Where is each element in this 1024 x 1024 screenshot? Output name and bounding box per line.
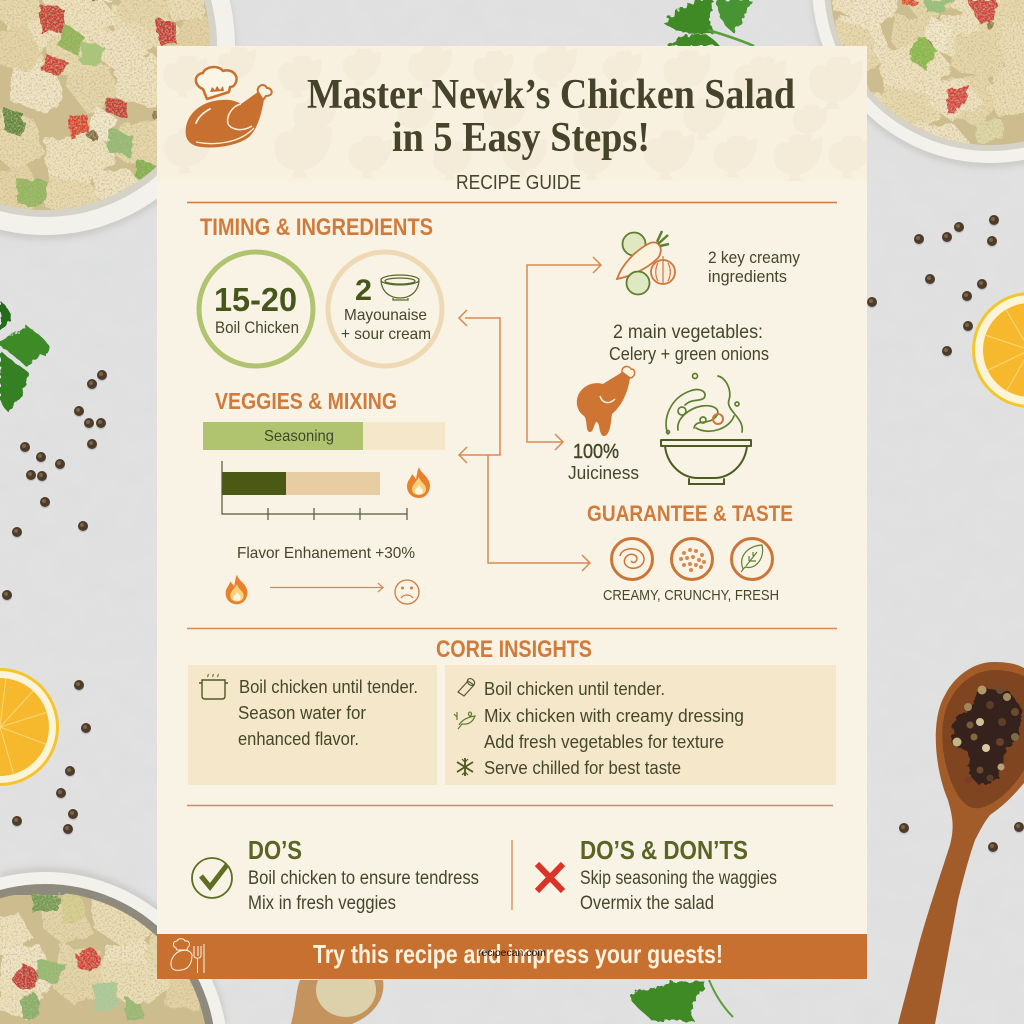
- section: don'ts: [537, 835, 777, 914]
- list: do's: [248, 868, 479, 914]
- heading: veggies: VEGGIES & MIXING: [215, 388, 397, 414]
- photo: parsley top: [664, 0, 754, 46]
- bar chart: mixing: [222, 461, 407, 520]
- list: do's: Mix in fresh veggies: [248, 893, 396, 914]
- list: don'ts: Skip seasoning the waggies: [580, 868, 777, 889]
- panel: boil tips: Season water for: [238, 703, 366, 723]
- icon: check: [192, 858, 232, 898]
- icon: fresh leaf: [732, 538, 772, 580]
- text: main vegetables: Celery + green onions: [609, 344, 769, 364]
- text: key creamy ingredients: [708, 248, 800, 286]
- stat circle: creamy base: + sour cream: [341, 326, 431, 343]
- text: main vegetables: 2 main vegetables:: [613, 322, 763, 343]
- photo: lemon left: [0, 668, 59, 786]
- panel: mixing tips: Mix chicken with creamy dressing: [484, 706, 744, 726]
- title: [307, 72, 795, 161]
- photo: salad bowl top left: [0, 0, 236, 240]
- watermark: recipecan.com: [478, 948, 546, 959]
- panel: boil tips: Boil chicken until tender.: [239, 677, 418, 697]
- progress bar: seasoning: Seasoning: [264, 428, 334, 445]
- icon: chicken with chef hat: [186, 67, 272, 148]
- progress bar: seasoning: [203, 422, 445, 450]
- text: key creamy ingredients: ingredients: [708, 267, 787, 286]
- panel: mixing tips: [445, 665, 836, 785]
- icon: flame: [407, 467, 430, 498]
- list: do's: Boil chicken to ensure tendress: [248, 868, 479, 889]
- icon: chicken outline: [171, 939, 204, 973]
- section: do's: [192, 835, 479, 914]
- list: don'ts: [580, 868, 777, 914]
- connector arrows: [459, 257, 601, 571]
- icon: vegetables: [617, 231, 675, 294]
- stat circle: creamy base: 2: [355, 274, 372, 307]
- footer banner: Try this recipe and impress your guests!: [313, 939, 723, 969]
- section: timing and ingredients: [199, 214, 442, 366]
- stat circle: boil time: 15-20: [214, 281, 297, 318]
- panel: mixing tips: Serve chilled for best taste: [484, 758, 681, 778]
- footer banner: [157, 934, 867, 979]
- list: don'ts: Overmix the salad: [580, 893, 714, 914]
- section: core insights: [188, 636, 836, 785]
- icon: creamy swirl: [612, 538, 652, 580]
- stat circle: creamy base: Mayounaise: [344, 307, 427, 324]
- label: flavor enhancement: Flavor Enhanement +30%: [237, 545, 415, 562]
- title: in 5 Easy Steps!: [392, 115, 650, 161]
- icon: juicy chicken: [577, 366, 635, 436]
- heading: don'ts: DO’S & DON’TS: [580, 835, 748, 865]
- heading: do's: DO’S: [248, 835, 302, 865]
- stat circle: creamy base: [328, 252, 442, 366]
- decor: scattered peppercorns: [2, 215, 1024, 854]
- text: juiciness: 100%: [573, 441, 619, 463]
- arrow: flame to sad face: [270, 583, 383, 592]
- icon: flame small: [226, 575, 247, 604]
- section: guarantee and taste: [587, 501, 793, 604]
- photo: parsley left: [0, 301, 50, 412]
- label: textures: CREAMY, CRUNCHY, FRESH: [603, 587, 779, 604]
- photo: salad bowl top right: [811, 0, 1024, 173]
- icon: mixing bowl with swirl: [661, 374, 751, 484]
- photo: parsley bottom: [630, 980, 733, 1021]
- photo: wooden spoon with peppercorns: [898, 662, 1024, 1024]
- subtitle: RECIPE GUIDE: [456, 172, 581, 194]
- icon: red cross: [537, 864, 563, 891]
- panel: mixing tips: Boil chicken until tender.: [484, 679, 665, 699]
- panel: recipe card: [157, 45, 872, 979]
- photo: salad bowl bottom left: [0, 867, 227, 1024]
- heading: guarantee: GUARANTEE & TASTE: [587, 501, 793, 526]
- heading: core insights: CORE INSIGHTS: [436, 636, 592, 663]
- icon: crunchy crumbs: [672, 538, 712, 580]
- text: main vegetables: [609, 322, 769, 364]
- panel: boil tips: [188, 665, 437, 785]
- heading: timing: TIMING & INGREDIENTS: [200, 214, 433, 241]
- text: juiciness: Juiciness: [568, 463, 639, 483]
- photo: lemon right: [972, 292, 1024, 408]
- section: veggies and mixing: [203, 388, 445, 604]
- icon: sad face: [395, 580, 419, 604]
- stat circle: boil time: Boil Chicken: [215, 318, 299, 337]
- stat circle: boil time: [199, 252, 313, 366]
- title: Master Newk’s Chicken Salad: [307, 72, 795, 118]
- text: key creamy ingredients: 2 key creamy: [708, 248, 800, 267]
- text: juiciness: [568, 441, 639, 483]
- header band with chicken pattern: [157, 45, 872, 181]
- panel: boil tips: enhanced flavor.: [238, 729, 359, 749]
- photo: small spoon with dressing: [291, 963, 383, 1024]
- panel: mixing tips: Add fresh vegetables for texture: [484, 732, 724, 752]
